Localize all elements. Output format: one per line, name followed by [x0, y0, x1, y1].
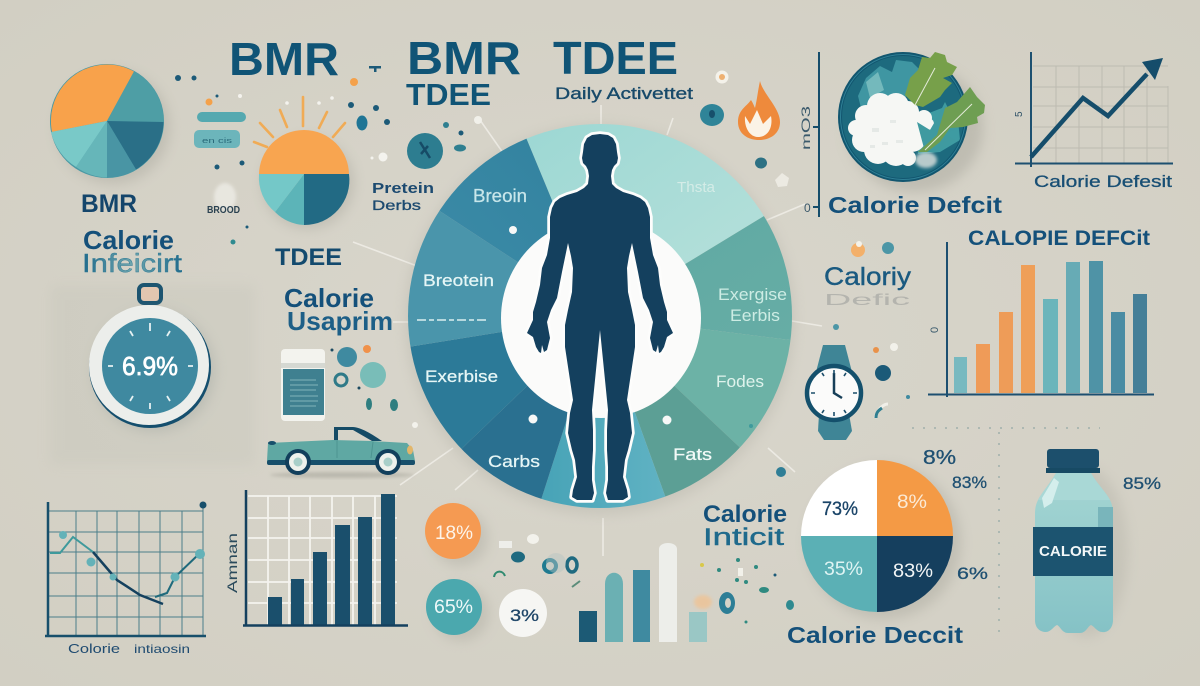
icon: supplement jar	[281, 349, 325, 421]
pie chart: top left	[50, 64, 170, 184]
bar chart: bottom center	[579, 543, 707, 642]
label: Calorie Usaprim: Usaprim	[287, 306, 393, 336]
label: Calorie Infeicirt	[82, 225, 183, 278]
outer percentages	[923, 447, 1161, 583]
bar chart: right	[928, 242, 1154, 397]
wheel segment: lower right	[634, 386, 740, 496]
icon: food bowl	[838, 52, 985, 192]
human silhouette	[527, 134, 673, 500]
label: Caloriy Defic: Caloriy	[824, 263, 912, 291]
icon: flame	[738, 81, 780, 140]
bar chart: bottom left rising	[224, 490, 408, 626]
sun pie chart	[254, 97, 354, 229]
label: Calorie Usaprim	[284, 283, 393, 336]
wheel labels: Fats	[673, 445, 712, 464]
axis beside bowl: mO3	[799, 105, 813, 150]
label: Calorie Infeicirt: Calorie	[83, 225, 174, 255]
icons above wheel	[407, 70, 789, 187]
title row: TDEE	[406, 77, 491, 112]
pie labels	[822, 492, 933, 582]
label: Calorie Usaprim: Calorie	[284, 283, 374, 313]
wheel labels: Breotein	[423, 271, 494, 290]
stopwatch gauge: 6.9%	[122, 351, 178, 381]
wheel dots	[509, 226, 672, 424]
axis beside bowl	[799, 52, 819, 217]
heading: Calorie Defcit: Calorie Defcit	[828, 192, 1002, 218]
pie labels: 8%	[897, 492, 927, 513]
outer percentages: 85%	[1123, 474, 1161, 493]
heading: Calopie Defcit: CALOPIE DEFCit	[968, 227, 1150, 250]
label: BMR left: BMR	[81, 190, 137, 218]
icon: pickup truck	[267, 422, 418, 478]
axis beside bowl: 0	[804, 201, 811, 215]
wheel segment: bottom	[542, 412, 666, 508]
wheel labels: Exerbise	[425, 367, 498, 386]
connector lines	[353, 105, 822, 556]
label: Pretein Derbs: Derbs	[372, 197, 421, 213]
bar chart: bottom left rising: Amnan	[224, 533, 240, 593]
wheel labels: Carbs	[488, 452, 540, 471]
label: Calorie Indicit	[703, 501, 787, 551]
line chart: rising arrow	[1014, 52, 1173, 167]
wheel labels	[423, 179, 787, 471]
percent bubbles	[425, 503, 547, 641]
rice	[848, 93, 934, 166]
small pills and scattered icons: en cis	[202, 138, 233, 145]
icon: water bottle: CALORIE	[1039, 543, 1107, 560]
label: Pretein Derbs	[372, 180, 434, 213]
wheel segment: top left	[440, 138, 552, 262]
label: Calorie Indicit: Inticit	[703, 524, 784, 551]
label: Calorie Defesit: Calorie Defesit	[1034, 172, 1172, 191]
icon: water bottle	[1033, 449, 1128, 637]
pie chart: bottom right quarters	[800, 460, 961, 619]
label: Calorie Indicit: Calorie	[703, 501, 787, 528]
wheel segment: upper left	[408, 211, 518, 346]
pie labels: 73%	[822, 499, 858, 520]
wheel labels: Fodes	[716, 372, 764, 391]
pie labels: 83%	[893, 561, 933, 582]
scattered blobs below wheel	[494, 534, 580, 587]
axis caption	[68, 642, 190, 656]
outer percentages: 8%	[923, 447, 956, 469]
title row	[229, 32, 693, 112]
label: Caloriy Defic	[824, 263, 912, 309]
wheel segment: upper right	[685, 216, 792, 340]
wheel segment: left	[410, 332, 528, 449]
central wheel	[404, 124, 796, 514]
wheel labels: Breoin	[473, 186, 527, 206]
dotted guide lines	[912, 428, 1100, 632]
pie labels: 35%	[824, 559, 863, 580]
small pills and scattered icons	[175, 66, 390, 244]
wheel labels: Thsta	[677, 179, 716, 196]
label: Calorie Deccit: Calorie Deccit	[787, 622, 963, 648]
wheel labels: Exergise	[718, 285, 787, 304]
scattered icons near bottom pie	[694, 424, 794, 624]
lower teal leaf	[917, 102, 958, 152]
title row: Daily Activettet	[555, 84, 693, 103]
axis caption: intiaosin	[134, 642, 190, 656]
icon: wristwatch	[807, 345, 861, 440]
wheel segment: top light teal	[526, 124, 764, 264]
bubble: orange: 18%	[435, 523, 473, 544]
white inner circle	[501, 218, 701, 418]
wheel segment: lower left	[462, 386, 568, 499]
line chart: bottom left	[45, 502, 206, 656]
icons near watch	[833, 241, 910, 418]
outer percentages: 83%	[952, 473, 987, 492]
label: TDEE: TDEE	[275, 244, 342, 271]
title row: BMR	[407, 32, 521, 84]
bubble: white: 3%	[510, 606, 539, 625]
bubble: teal: 65%	[434, 597, 473, 618]
green leaves	[905, 52, 957, 107]
wheel segment: right	[674, 328, 790, 448]
label: Caloriy Defic: Defic	[824, 292, 910, 309]
line chart: rising arrow: 5	[1014, 111, 1025, 117]
small pills and scattered icons: BROOD	[207, 205, 240, 216]
outer percentages: 6%	[957, 564, 988, 583]
label: Pretein Derbs: Pretein	[372, 180, 434, 197]
teal leaves in bowl	[858, 60, 918, 106]
bar chart: right: 0	[929, 327, 941, 333]
halftone patch	[50, 285, 255, 465]
label: Calorie Infeicirt: Infeicirt	[82, 248, 183, 278]
scattered blobs near jar	[330, 345, 398, 411]
title row: TDEE	[553, 32, 678, 84]
stopwatch gauge	[50, 285, 255, 465]
wheel labels: Eerbis	[730, 306, 780, 325]
icon: teal circle figure	[407, 133, 443, 169]
title row: BMR	[229, 33, 339, 85]
axis caption: Colorie	[68, 642, 120, 656]
